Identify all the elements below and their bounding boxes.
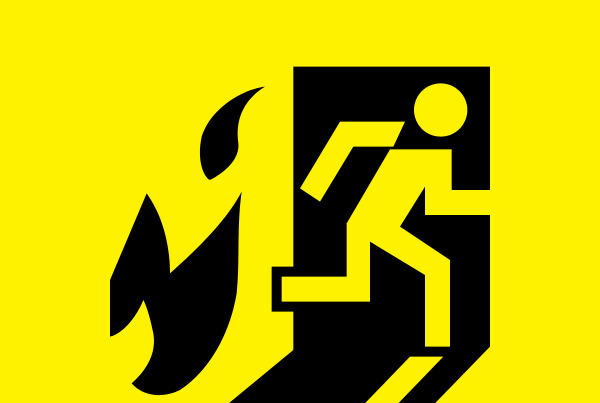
running man — [282, 83, 490, 347]
flame: bottom — [110, 192, 242, 395]
floor stripe — [363, 357, 443, 403]
door — [227, 67, 490, 403]
flame: top — [200, 87, 265, 180]
